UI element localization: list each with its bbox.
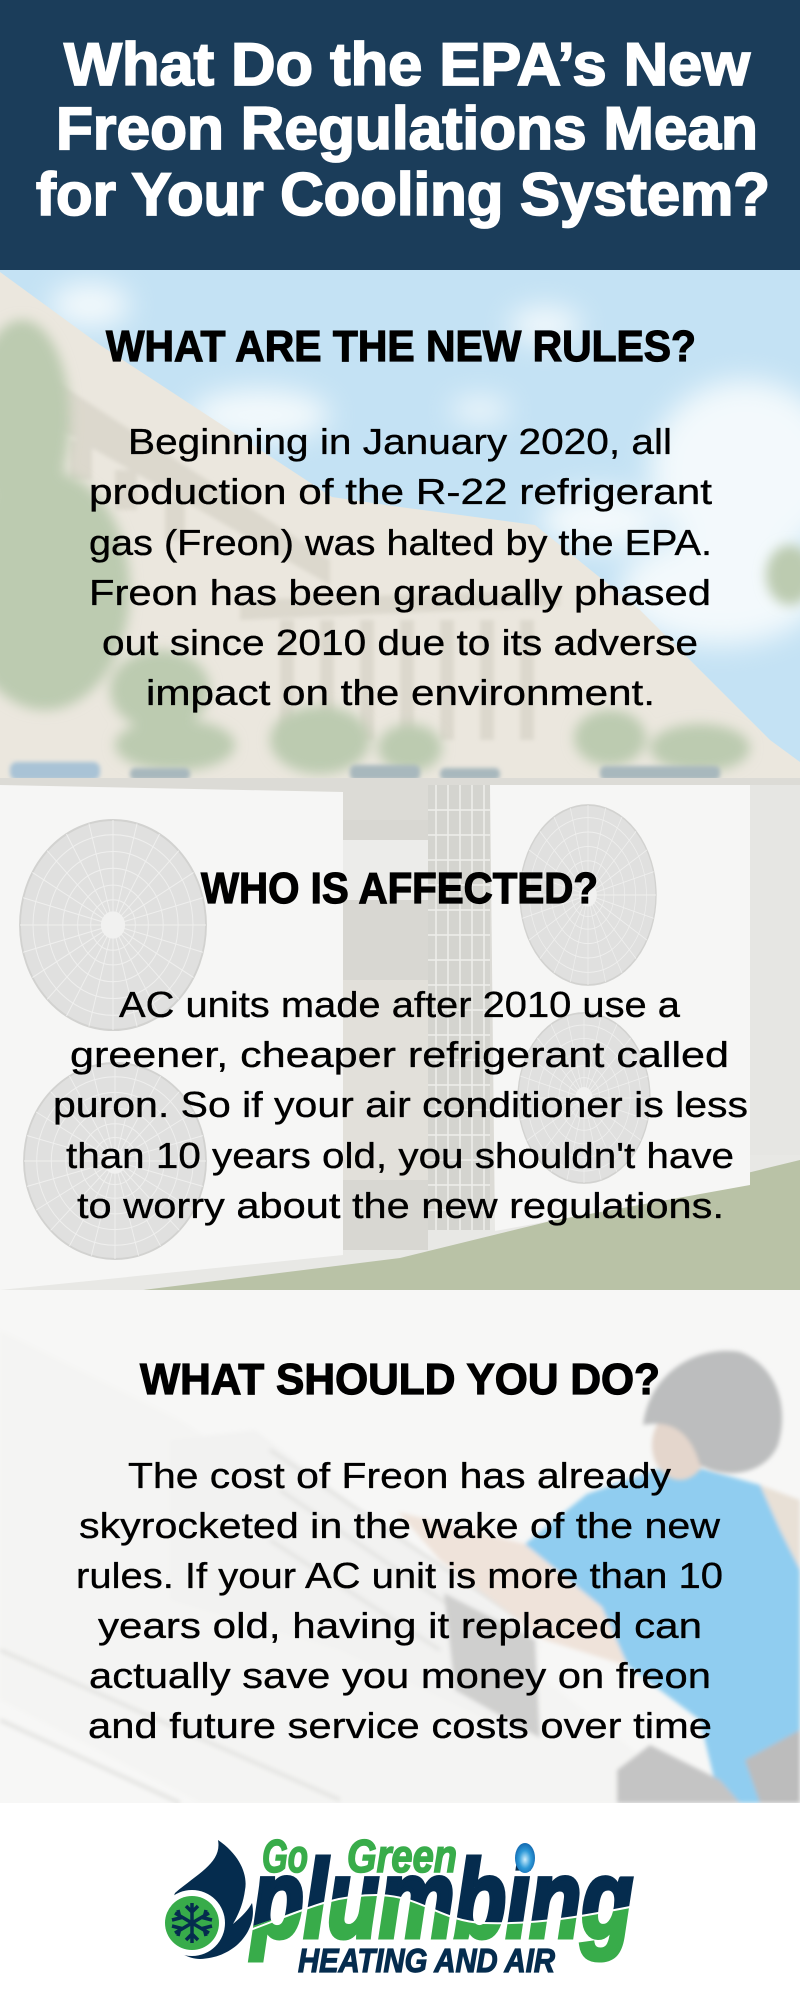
photo: technician servicing an indoor AC unit (0, 1290, 800, 1803)
text: Go Green (262, 1830, 457, 1882)
text: who is affected body: AC units made after 2010 use a (119, 984, 681, 1025)
text: plumbing wordmark (248, 1854, 634, 1962)
text: what should you do body (76, 1455, 723, 1746)
heading: what should you do: WHAT SHOULD YOU DO? (140, 1355, 660, 1404)
text: what should you do body: years old, having it replaced can (98, 1605, 702, 1646)
text: what should you do body: and future service costs over time (88, 1705, 712, 1746)
photo: government building against the sky (0, 270, 800, 780)
panel: what are the new rules (0, 270, 800, 780)
heading: who is affected: WHO IS AFFECTED? (201, 864, 598, 913)
text: new rules body: production of the R-22 refrigerant (89, 471, 712, 512)
title (36, 31, 770, 228)
logo: Go Green Plumbing Heating and Air (165, 1838, 634, 1973)
icon: water droplet (515, 1843, 535, 1873)
text: new rules body: Beginning in January 2020, all (128, 421, 672, 462)
text: Go Green: Go (262, 1830, 308, 1882)
text: who is affected body (53, 984, 748, 1226)
heading: what are the new rules: WHAT ARE THE NEW RULES? (106, 322, 696, 371)
icon: flame-shaped drop with snowflake (159, 1840, 253, 1959)
text: who is affected body: greener, cheaper refrigerant called (70, 1034, 729, 1075)
panel: what should you do (0, 1290, 800, 1803)
panel: who is affected (0, 778, 800, 1290)
text: what should you do body: rules. If your AC unit is more than 10 (76, 1555, 723, 1596)
text: what should you do body: actually save you money on freon (89, 1655, 711, 1696)
text: what should you do body: The cost of Freon has already (128, 1455, 671, 1496)
text: what should you do body: skyrocketed in the wake of the new (79, 1505, 721, 1546)
text: new rules body: gas (Freon) was halted by the EPA. (89, 522, 712, 563)
text: new rules body (89, 421, 712, 713)
text: new rules body: Freon has been gradually phased (89, 572, 711, 613)
text: who is affected body: to worry about the new regulations. (77, 1185, 724, 1226)
title: for Your Cooling System? (36, 161, 770, 228)
text: new rules body: impact on the environment. (146, 672, 655, 713)
text: plumbing wordmark: plumbing (250, 1838, 633, 1961)
panel: title banner (0, 0, 800, 270)
text: heating and air: HEATING AND AIR (298, 1942, 555, 1979)
title: Freon Regulations Mean (56, 95, 758, 162)
text: new rules body: out since 2010 due to its adverse (102, 622, 698, 663)
text: who is affected body: puron. So if your air conditioner is less (53, 1084, 748, 1125)
photo: outdoor AC condenser units (0, 778, 800, 1290)
text: Go Green: Green (347, 1830, 457, 1882)
text: plumbing wordmark: plumbing (250, 1838, 633, 1961)
title: What Do the EPA’s New (64, 31, 750, 98)
text: who is affected body: than 10 years old, you shouldn't have (66, 1135, 734, 1176)
